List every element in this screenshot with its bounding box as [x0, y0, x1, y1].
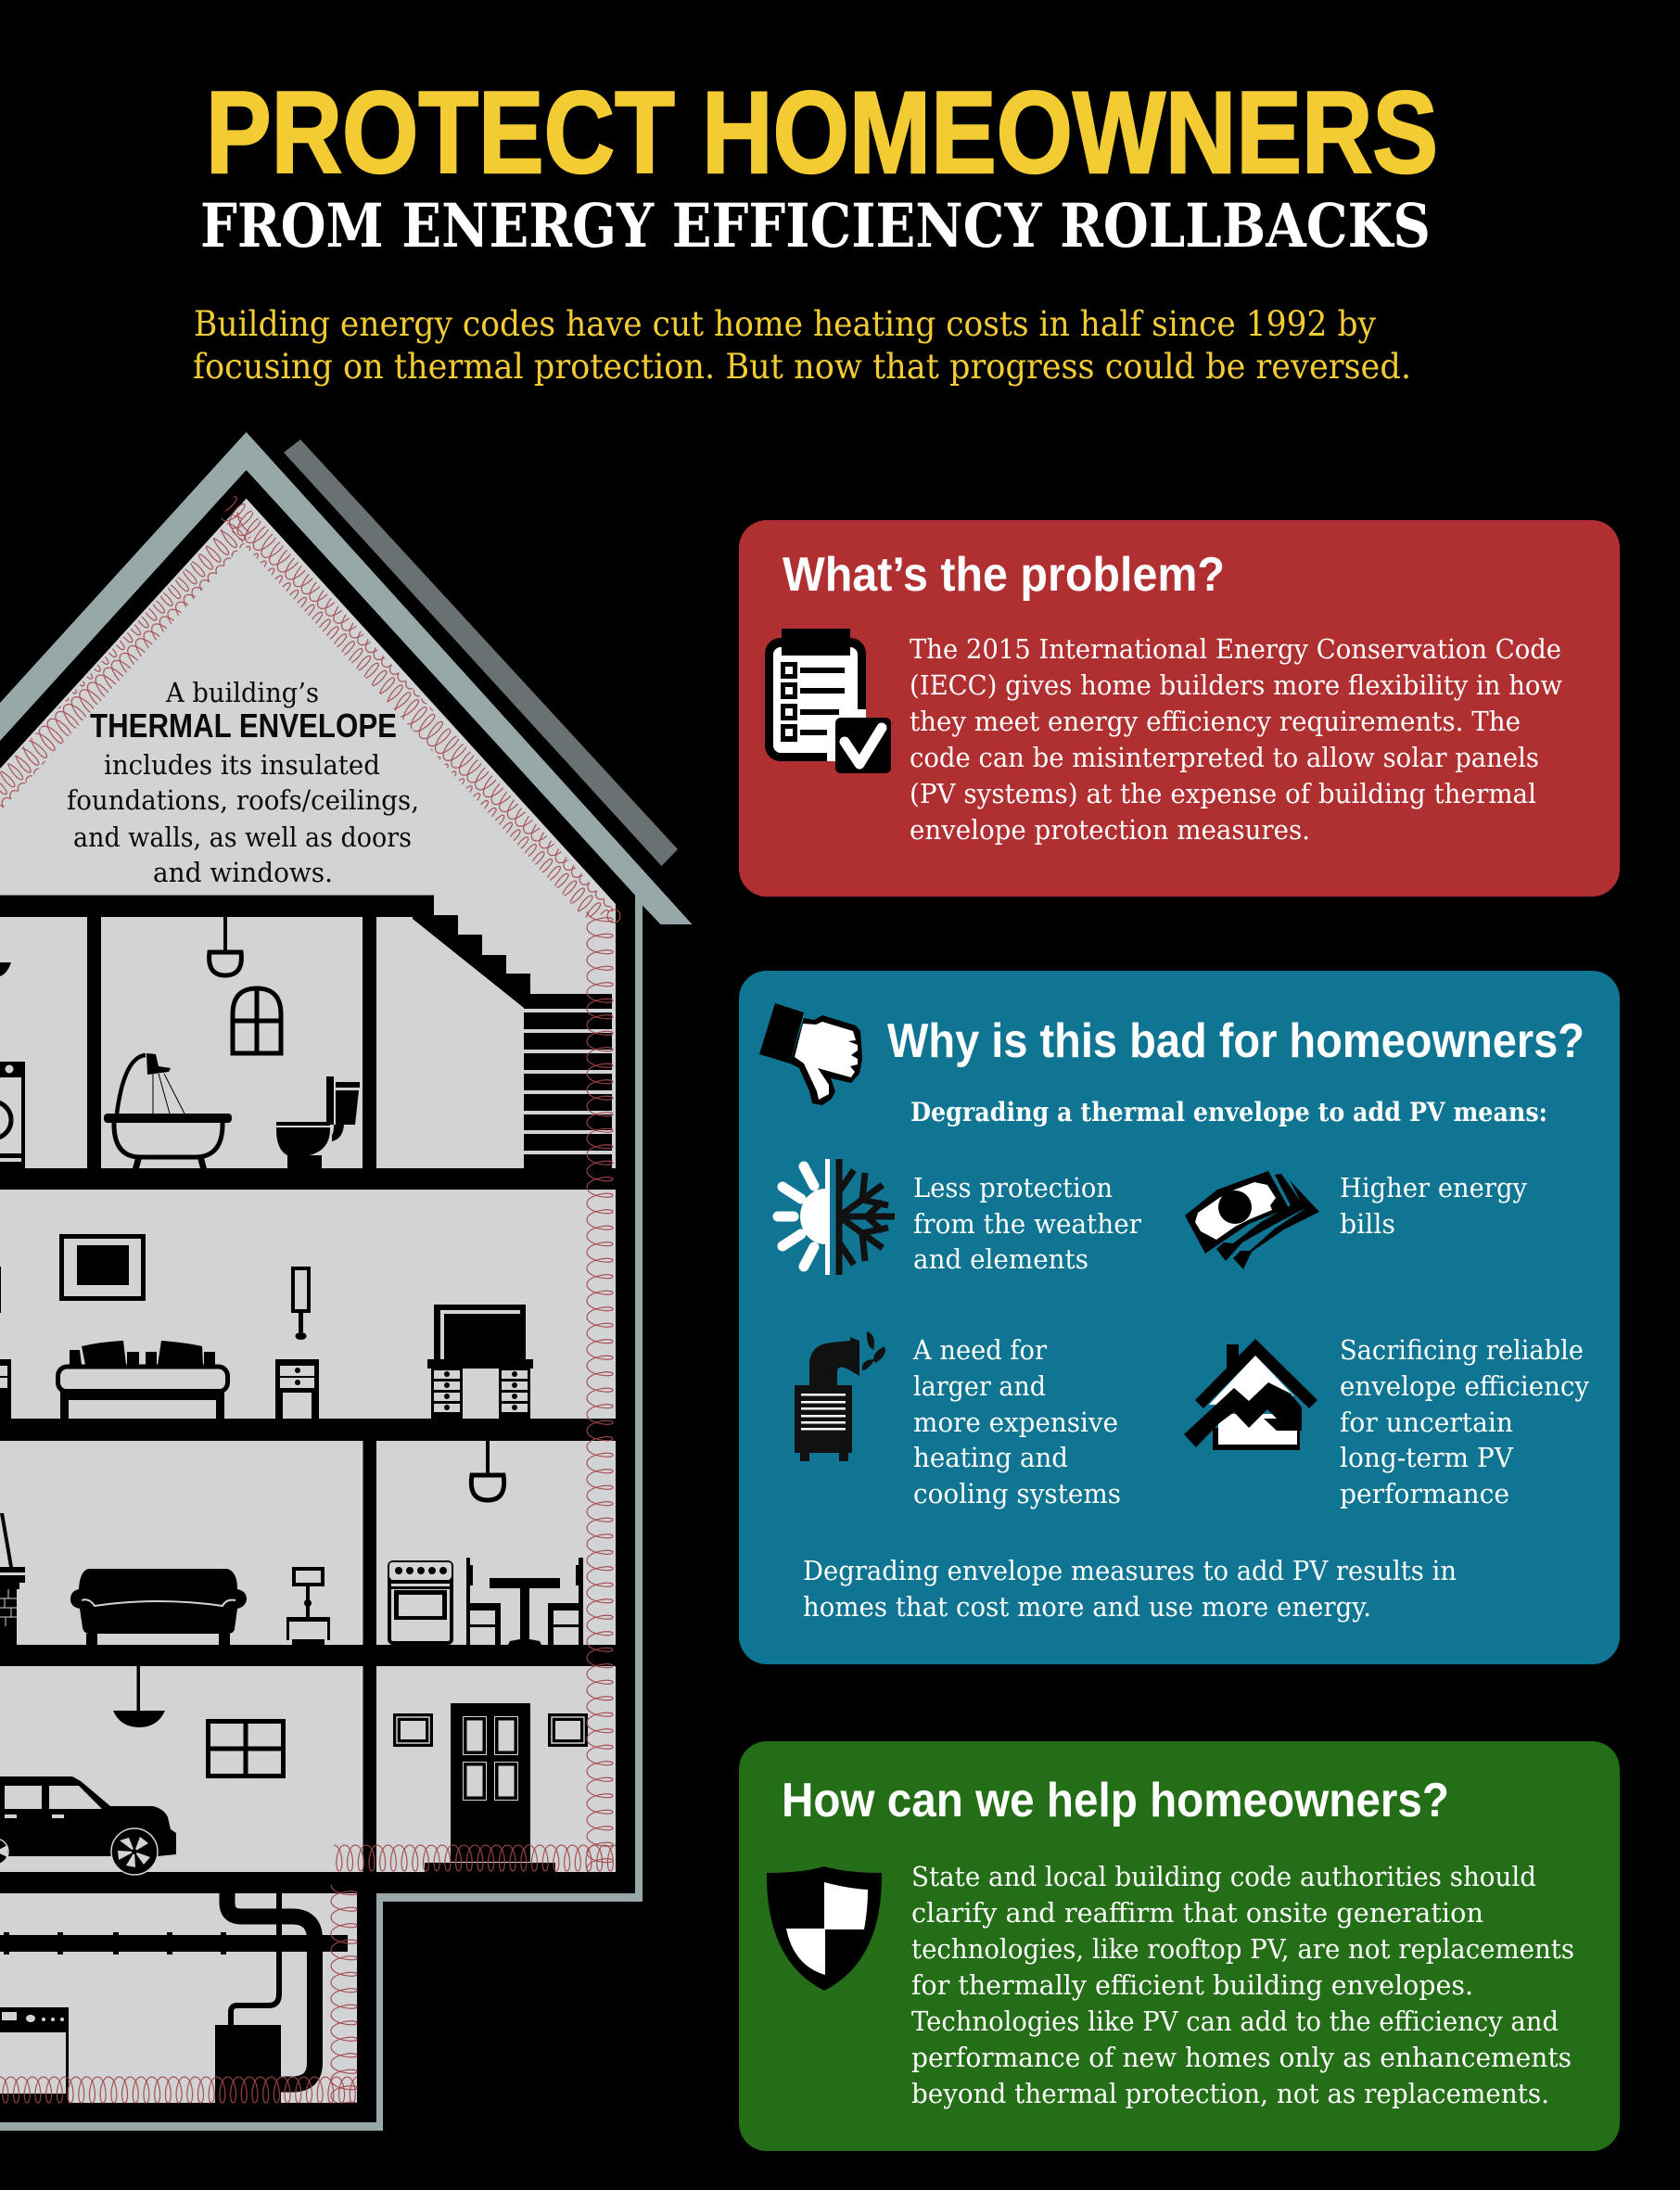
icon: thumbs down: [759, 1003, 862, 1105]
icon: furnace: [795, 1331, 885, 1461]
arched window: [233, 988, 281, 1053]
panel: what's the problem: [739, 520, 1620, 897]
insulation right wall: [586, 911, 614, 1872]
thermal envelope caption: and windows.: [153, 857, 333, 888]
desk with mirror: [427, 1305, 533, 1419]
closing statement: Degrading envelope measures to add PV results in: [803, 1555, 1457, 1586]
bathtub with shower: [104, 1053, 232, 1168]
small left ceiling lamp: [0, 962, 11, 976]
item: less protection: Less protection: [913, 1172, 1113, 1203]
side table lamp: [286, 1569, 330, 1645]
thermal envelope caption: includes its insulated: [104, 749, 380, 781]
problem body text: (IECC) gives home builders more flexibility in how: [910, 669, 1562, 701]
basement pipe: [0, 1932, 348, 1954]
toilet: [276, 1076, 360, 1168]
kitchen lamp: [471, 1441, 504, 1500]
item: less protection: from the weather: [913, 1208, 1141, 1240]
icon: clipboard checklist: [765, 629, 891, 773]
intro text: focusing on thermal protection. But now that progress could be reversed.: [193, 347, 1411, 387]
help body text: [911, 1861, 1574, 2109]
panel: why is this bad: [739, 971, 1620, 1664]
closing statement: homes that cost more and use more energy.: [803, 1591, 1371, 1623]
thermal envelope caption: A building’s: [165, 677, 319, 708]
basement water line: [231, 1893, 279, 2027]
problem body text: The 2015 International Energy Conservation Code: [910, 633, 1561, 665]
floor lamp on nightstand: [293, 1268, 309, 1340]
item: larger systems: A need for: [912, 1334, 1047, 1366]
item: sacrificing efficiency: Sacrificing reliable: [1340, 1334, 1584, 1366]
icon: money bills: [1185, 1171, 1319, 1269]
problem body text: [910, 633, 1562, 846]
item: higher energy bills: [1340, 1172, 1528, 1240]
thermal envelope caption: THERMAL ENVELOPE: [90, 707, 397, 745]
car: [0, 1776, 176, 1875]
nightstand: [275, 1359, 319, 1419]
item: sacrificing efficiency: envelope efficiency: [1340, 1370, 1590, 1402]
problem body text: envelope protection measures.: [910, 814, 1310, 846]
item: sacrificing efficiency: for uncertain: [1340, 1407, 1513, 1438]
thermal envelope caption: foundations, roofs/ceilings,: [67, 784, 419, 816]
framed picture: [61, 1237, 143, 1298]
item: larger systems: cooling systems: [913, 1478, 1121, 1509]
furnace: [215, 2025, 281, 2103]
thermal envelope caption: [67, 677, 419, 888]
icon: sun and snowflake: [778, 1159, 895, 1275]
item: larger systems: larger and: [913, 1370, 1046, 1402]
heading: why is this bad: Why is this bad for homeowners?: [887, 1014, 1585, 1068]
duct: [227, 1893, 315, 2084]
stair treads: [524, 1009, 612, 1154]
item: higher energy bills: Higher energy: [1340, 1172, 1528, 1203]
help body text: clarify and reaffirm that onsite generation: [911, 1897, 1483, 1929]
help body text: State and local building code authorities should: [911, 1861, 1536, 1892]
dining table and chairs: [466, 1558, 583, 1645]
heading: how can we help: How can we help homeowners?: [782, 1774, 1449, 1827]
help body text: performance of new homes only as enhancements: [911, 2042, 1572, 2073]
basement interior: [0, 1893, 357, 2103]
item: sacrificing efficiency: performance: [1340, 1478, 1509, 1509]
item: less protection: [913, 1172, 1141, 1275]
intro text: Building energy codes have cut home heating costs in half since 1992 by: [194, 304, 1376, 344]
garage window: [208, 1721, 284, 1776]
attic floor and staircase: [0, 896, 612, 1168]
sofa: [70, 1569, 247, 1645]
subheading: Degrading a thermal envelope to add PV means:: [910, 1097, 1547, 1127]
bed: [57, 1341, 228, 1419]
icon: shield: [767, 1866, 882, 1991]
problem body text: they meet energy efficiency requirements. The: [910, 706, 1521, 737]
problem body text: code can be misinterpreted to allow solar panels: [910, 742, 1539, 773]
house interior upper: [0, 499, 616, 1872]
insulation first floor slab: [334, 1844, 616, 1872]
item: less protection: and elements: [913, 1243, 1088, 1275]
fireplace partial: [0, 1513, 25, 1645]
dark roof shingle strip: [284, 439, 678, 866]
insulation left roof: [0, 512, 252, 811]
title: PROTECT HOMEOWNERS: [206, 69, 1438, 197]
help body text: technologies, like rooftop PV, are not replacements: [911, 1933, 1574, 1965]
help body text: beyond thermal protection, not as replacements.: [911, 2078, 1549, 2109]
heading: what's the problem: What’s the problem?: [783, 548, 1225, 602]
help body text: for thermally efficient building envelopes.: [911, 1969, 1473, 2001]
closing statement: [803, 1555, 1457, 1623]
subtitle: FROM ENERGY EFFICIENCY ROLLBACKS: [200, 191, 1431, 261]
insulation corner loop: [607, 910, 620, 923]
front door: [425, 1703, 555, 1872]
help body text: Technologies like PV can add to the efficiency and: [911, 2005, 1559, 2037]
bathroom lamp: [210, 917, 241, 975]
thermal envelope caption: and walls, as well as doors: [73, 821, 412, 853]
house cutaway illustration: [0, 432, 692, 2131]
side window right: [548, 1713, 588, 1747]
thermal envelope insulation: [0, 493, 620, 2104]
insulation basement wall: [330, 1885, 358, 2103]
dishwasher: [0, 2007, 69, 2103]
item: sacrificing efficiency: [1340, 1334, 1590, 1509]
stove: [389, 1562, 452, 1643]
item: higher energy bills: bills: [1340, 1208, 1395, 1240]
garage lamp: [113, 1666, 165, 1727]
item: larger systems: heating and: [913, 1442, 1068, 1473]
washer: [0, 1062, 25, 1168]
icon: broken house: [1184, 1339, 1317, 1450]
item: larger systems: [912, 1334, 1121, 1509]
house outer shell: [0, 432, 692, 2131]
intro text: [193, 304, 1411, 387]
left partial nightstand: [0, 1267, 11, 1419]
item: sacrificing efficiency: long-term PV: [1340, 1442, 1514, 1473]
insulation basement floor: [0, 2076, 357, 2104]
side window left: [393, 1713, 433, 1747]
problem body text: (PV systems) at the expense of building thermal: [910, 778, 1536, 809]
floors and walls: [0, 917, 616, 1893]
panel: how can we help: [739, 1741, 1620, 2151]
insulation right roof: [221, 493, 616, 918]
item: larger systems: more expensive: [913, 1407, 1118, 1438]
